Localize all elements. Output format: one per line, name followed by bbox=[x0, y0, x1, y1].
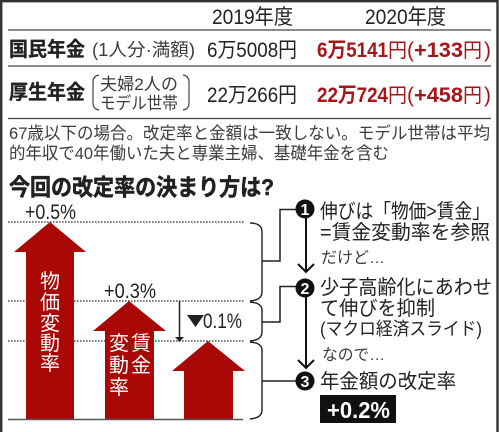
footnote: 67歳以下の場合。改定率と金額は一致しない。モデル世帯は平均 bbox=[9, 123, 490, 143]
row: 厚生年金: 厚生年金 bbox=[9, 81, 85, 104]
step 2: 少子高齢化にあわせ bbox=[320, 276, 492, 299]
arrow: 賃金変動率: 金 bbox=[131, 354, 151, 377]
value: 6万5141円(+133円): ( bbox=[407, 39, 414, 62]
value: 22万724円(+458円): ) bbox=[484, 84, 491, 107]
down arrow ▼0.1% bbox=[175, 301, 242, 342]
row: 厚生年金 bbox=[9, 75, 297, 113]
down arrow ▼0.1%: 0.1% bbox=[203, 310, 242, 333]
arrow: 賃金変動率: 変 bbox=[109, 332, 129, 355]
value: 22万724円(+458円): +458 bbox=[414, 84, 463, 107]
arrow: 物価変動率: 価 bbox=[40, 291, 60, 314]
value: 22万724円(+458円): ( bbox=[407, 84, 414, 107]
arrow: 物価変動率 bbox=[14, 222, 86, 419]
value: 22万724円(+458円): 22万724 bbox=[317, 84, 388, 107]
arrow: result bbox=[172, 341, 245, 419]
だけど: だけど… bbox=[321, 249, 385, 267]
step 3: 3 bbox=[301, 374, 310, 391]
row: 厚生年金: モデル世帯 bbox=[100, 93, 178, 113]
step 1: =賃金変動率を参照 bbox=[320, 221, 490, 244]
flow arrows bbox=[298, 215, 314, 368]
row: 国民年金: 国民年金 bbox=[9, 38, 85, 61]
arrow: 物価変動率: 物 bbox=[40, 270, 60, 293]
arrow: 物価変動率: 率 bbox=[40, 352, 60, 375]
value: 6万5141円(+133円): ) bbox=[484, 39, 491, 62]
row: 厚生年金: 夫婦2人の bbox=[100, 75, 178, 94]
なので: なので… bbox=[322, 346, 385, 364]
label +0.5%: +0.5% bbox=[25, 201, 76, 224]
arrow: 物価変動率: 動 bbox=[40, 332, 60, 355]
connectors bbox=[262, 210, 300, 381]
footnote bbox=[9, 123, 490, 163]
step 2 bbox=[296, 276, 492, 339]
row: 国民年金: 6万5008円 bbox=[207, 39, 297, 62]
footnote: 的年収で40年働いた夫と専業主婦、基礎年金を含む bbox=[9, 144, 389, 163]
row: 国民年金: (1人分·満額) bbox=[92, 40, 195, 60]
arrow: 賃金変動率: 率 bbox=[109, 376, 129, 399]
value: 6万5141円(+133円): 円 bbox=[463, 40, 482, 62]
step 2: (マクロ経済スライド) bbox=[320, 319, 482, 339]
row: 国民年金 bbox=[9, 38, 297, 62]
value: 6万5141円(+133円): 円 bbox=[388, 40, 407, 62]
braces bbox=[250, 223, 262, 419]
step 2: 2 bbox=[301, 281, 310, 298]
step 2: て伸びを抑制 bbox=[320, 297, 435, 320]
table header: 2019年度 bbox=[212, 6, 293, 29]
value: 6万5141円(+133円): 6万5141 bbox=[317, 39, 388, 62]
table header: 2020年度 bbox=[365, 6, 446, 29]
table header bbox=[212, 6, 446, 29]
row: 厚生年金: 22万266円 bbox=[207, 84, 297, 107]
arrow: 賃金変動率: 動 bbox=[109, 354, 129, 377]
step 3: 年金額の改定率 bbox=[320, 370, 456, 393]
arrow: 賃金変動率: 賃 bbox=[131, 332, 151, 355]
value: 22万724円(+458円): 円 bbox=[463, 85, 482, 107]
arrow: 物価変動率: 変 bbox=[40, 312, 60, 335]
value: 6万5141円(+133円) bbox=[317, 39, 491, 62]
heading: 今回の改定率の決まり方は? bbox=[9, 174, 274, 200]
step 1: 1 bbox=[301, 202, 310, 219]
value: 22万724円(+458円) bbox=[317, 84, 491, 107]
label +0.3%: +0.3% bbox=[104, 280, 156, 303]
arrow: 賃金変動率 bbox=[93, 301, 166, 419]
value: 6万5141円(+133円): +133 bbox=[414, 39, 463, 62]
value: 22万724円(+458円): 円 bbox=[388, 85, 407, 107]
result box +0.2%: +0.2% bbox=[327, 397, 390, 423]
step 1 bbox=[296, 200, 490, 244]
